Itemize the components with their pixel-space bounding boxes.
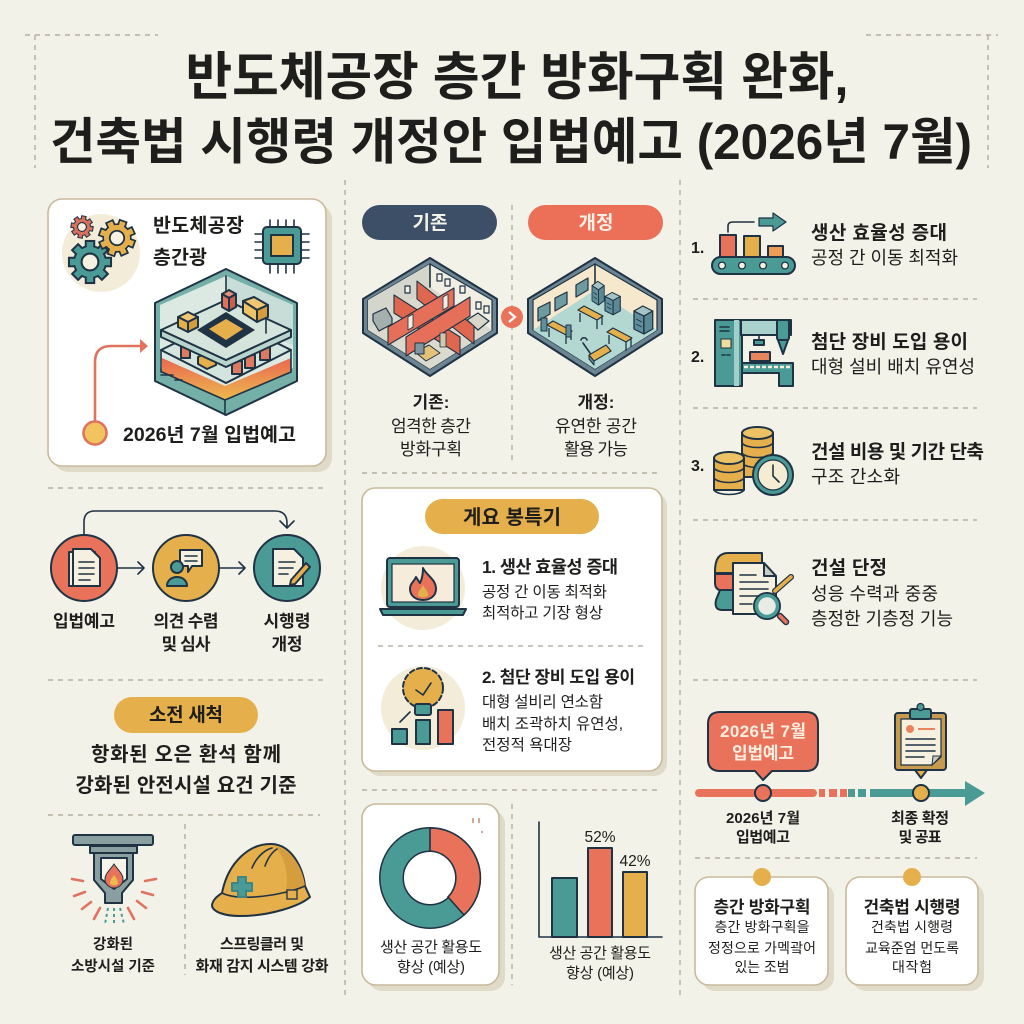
text: item 2: 배치 조곽하치 유연성, [482, 715, 623, 733]
benefit 2: 2. [691, 349, 704, 366]
step: notice: 입법예고 [53, 612, 115, 631]
icon: conveyor [712, 213, 795, 274]
card: floor compartment: 있는 조범 [734, 959, 790, 975]
label: sprinkler and detection: 스프링클러 및 [220, 936, 304, 953]
arrow: announcement pointer [84, 339, 148, 444]
icon: arrow between rooms [501, 306, 523, 328]
card: enforcement decree: 대작험 [892, 959, 932, 975]
callout: date [708, 712, 818, 780]
benefit 3: 건설 비용 및 기간 단축 [811, 441, 984, 463]
timeline [695, 704, 985, 846]
donut [392, 818, 483, 916]
pill: existing: 기존 [413, 212, 447, 234]
pill: revised: 개정 [579, 212, 613, 234]
icon: room with strict compartments [363, 258, 497, 376]
label: fire standard: 강화된 [93, 936, 133, 953]
text block: safety requirements: 강화된 안전시설 요건 기준 [76, 774, 296, 797]
benefit 2: 첨단 장비 도입 용이 [811, 331, 968, 353]
step: opinions: 및 심사 [162, 635, 211, 654]
callout: date: 2026년 7월 [720, 722, 806, 741]
pill: overview heading: 게요 봉특기 [463, 506, 561, 529]
heading: floor space: 반도체공장 [153, 215, 244, 237]
icon: chip [255, 220, 309, 273]
benefit 4 [715, 553, 953, 629]
text: item 1: 공정 간 이동 최적화 [482, 583, 607, 601]
label: donut: 생산 공간 활용도 [380, 939, 482, 956]
text block: safety requirements: 항화된 오은 환석 함께 [91, 743, 281, 766]
label: fire standard [71, 936, 155, 975]
label: sprinkler and detection [196, 936, 329, 975]
card: floor compartment: 정정으로 가멕괔어 [708, 940, 816, 956]
benefit 4: 층정한 기층정 기능 [811, 609, 953, 629]
icon: bulb and bars [381, 666, 465, 750]
benefit 1: 1. [691, 240, 704, 257]
benefit 1: 생산 효율성 증대 [811, 222, 947, 244]
label: revised: 개정: [578, 393, 614, 412]
text: item 1: 최적하고 기장 형상 [482, 604, 603, 622]
panel: semiconductor floor space [48, 199, 332, 472]
benefit 3: 구조 간소화 [811, 467, 900, 487]
benefit 4: 건설 단정 [811, 557, 887, 579]
card: enforcement decree: 건축법 시행령 [871, 919, 953, 935]
process flow [51, 511, 320, 654]
text: item 2: 전정적 욕대장 [482, 736, 572, 754]
label: donut [380, 939, 482, 976]
icon: sprinkler [72, 835, 156, 926]
card: floor compartment [695, 868, 834, 991]
label: publication: 최종 확정 [891, 810, 949, 827]
text: item 2 [482, 668, 635, 754]
bar chart: 생산 공간 활용도 [549, 945, 651, 962]
label: announcement [726, 810, 800, 846]
card: enforcement decree: 교육준엄 먼도록 [865, 940, 959, 956]
card: enforcement decree: 건축법 시행령 [864, 898, 960, 917]
benefit 3 [691, 427, 984, 495]
bar chart: 42% [619, 853, 651, 870]
panel: donut chart [362, 804, 505, 991]
label: fire standard: 소방시설 기준 [71, 958, 155, 975]
icon: gears [62, 214, 140, 292]
icon: machine [715, 320, 793, 386]
label: sprinkler and detection: 화재 감지 시스템 강화 [196, 958, 329, 975]
label: existing: 기존: [413, 393, 449, 412]
node: announcement [755, 785, 771, 801]
title: 건축법 시행령 개정안 입법예고 (2026년 7월) [50, 114, 972, 170]
label: publication: 및 공표 [898, 829, 942, 846]
benefit 2: 대형 설비 배치 유연성 [811, 357, 975, 377]
label: existing: 엄격한 층간 [391, 417, 471, 436]
step: opinions [153, 535, 219, 654]
text: item 1: 1. 생산 효율성 증대 [482, 557, 618, 577]
arrow: top connector [84, 511, 294, 536]
benefit 2 [691, 320, 975, 386]
timeline bar and arrow [695, 781, 985, 806]
bar chart: 52% [584, 829, 616, 846]
step: notice [51, 535, 117, 631]
panel: overview [362, 488, 667, 776]
text: item 2: 대형 설비리 연소함 [482, 693, 603, 711]
pill: existing [362, 205, 497, 240]
benefit 1 [691, 213, 958, 274]
label: existing [391, 393, 471, 459]
bar chart [539, 822, 662, 982]
label: revised: 활용 가능 [564, 440, 628, 459]
section heading pill: 소전 새척 [149, 704, 223, 726]
label: existing: 방화구획 [400, 440, 462, 459]
label: announcement date: 2026년 7월 입법예고 [123, 424, 296, 446]
icon: laptop with flame [380, 546, 466, 630]
benefit 4: 성응 수력과 중중 [811, 584, 938, 604]
icon: coins and clock [714, 427, 793, 495]
text block: safety requirements [76, 743, 296, 797]
step: opinions: 의견 수렴 [154, 612, 218, 631]
title: 반도체공장 층간 방화구획 완화, [186, 49, 848, 107]
label: announcement: 입법예고 [736, 829, 790, 846]
benefit 1: 공정 간 이동 최적화 [811, 248, 958, 268]
text: item 2: 2. 첨단 장비 도입 용이 [482, 668, 635, 687]
heading: floor space: 층간광 [153, 247, 207, 269]
card: floor compartment: 층간 방화구획을 [714, 919, 810, 935]
card: enforcement decree [846, 868, 984, 991]
pill: revised [528, 205, 663, 240]
label: donut: 향상 (예상) [397, 959, 465, 976]
icon: clipboard [895, 704, 946, 778]
title [50, 49, 972, 170]
callout: date: 입법예고 [732, 744, 794, 763]
heading: floor space [153, 215, 244, 269]
label: revised [555, 393, 637, 459]
section heading pill [114, 697, 258, 733]
pill: overview heading [425, 499, 599, 534]
label: announcement: 2026년 7월 [726, 810, 800, 827]
icon: open flexible room [528, 258, 662, 376]
label: publication [891, 810, 949, 846]
bar chart: 향상 (예상) [566, 965, 634, 982]
text: item 1 [482, 557, 618, 622]
icon: isometric building section [155, 269, 297, 415]
arrows: between steps [117, 562, 245, 574]
icon: documents and magnifier [715, 553, 791, 622]
step: revise: 개정 [272, 635, 302, 654]
step: revise: 시행령 [264, 612, 310, 631]
icon: safety helmet [212, 844, 310, 916]
node: publication [913, 785, 929, 801]
step: revise [254, 535, 320, 654]
label: revised: 유연한 공간 [555, 417, 637, 436]
card: floor compartment: 층간 방화구획 [714, 898, 810, 917]
benefit 3: 3. [691, 458, 704, 475]
